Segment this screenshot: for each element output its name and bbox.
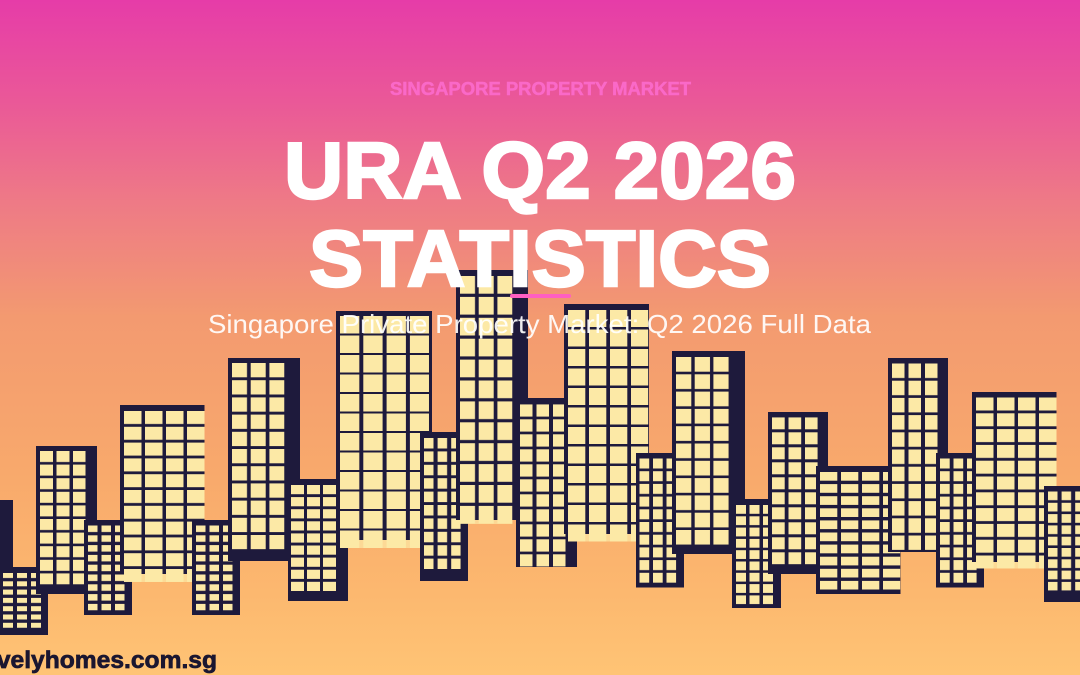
title: STATISTICS	[309, 214, 771, 303]
building 16	[732, 499, 781, 608]
subtitle: Singapore Private Property Market: Q2 2026 Full Data	[208, 309, 872, 339]
building 12	[516, 398, 577, 567]
building 20	[936, 453, 984, 588]
title underline accent	[510, 294, 571, 298]
building 13	[564, 304, 649, 542]
building 9	[336, 311, 432, 548]
title	[284, 126, 796, 303]
title: URA Q2 2026	[284, 126, 796, 215]
building 5	[120, 405, 204, 582]
building 19	[888, 358, 948, 552]
illustration: city skyline	[0, 270, 1080, 635]
building 7	[228, 358, 300, 561]
building 6	[192, 520, 240, 615]
building 1	[0, 500, 13, 580]
building 22	[1044, 486, 1080, 602]
building 8	[288, 479, 348, 601]
building 2	[0, 567, 48, 635]
kicker text: SINGAPORE PROPERTY MARKET	[390, 79, 691, 99]
building 21	[972, 392, 1056, 568]
building 18	[816, 466, 900, 594]
building 10	[420, 432, 468, 581]
building 3	[36, 446, 97, 594]
building 4	[84, 520, 132, 615]
building 17	[768, 412, 828, 574]
building 14	[636, 453, 684, 588]
building 15	[672, 351, 745, 554]
building 11	[456, 270, 528, 524]
